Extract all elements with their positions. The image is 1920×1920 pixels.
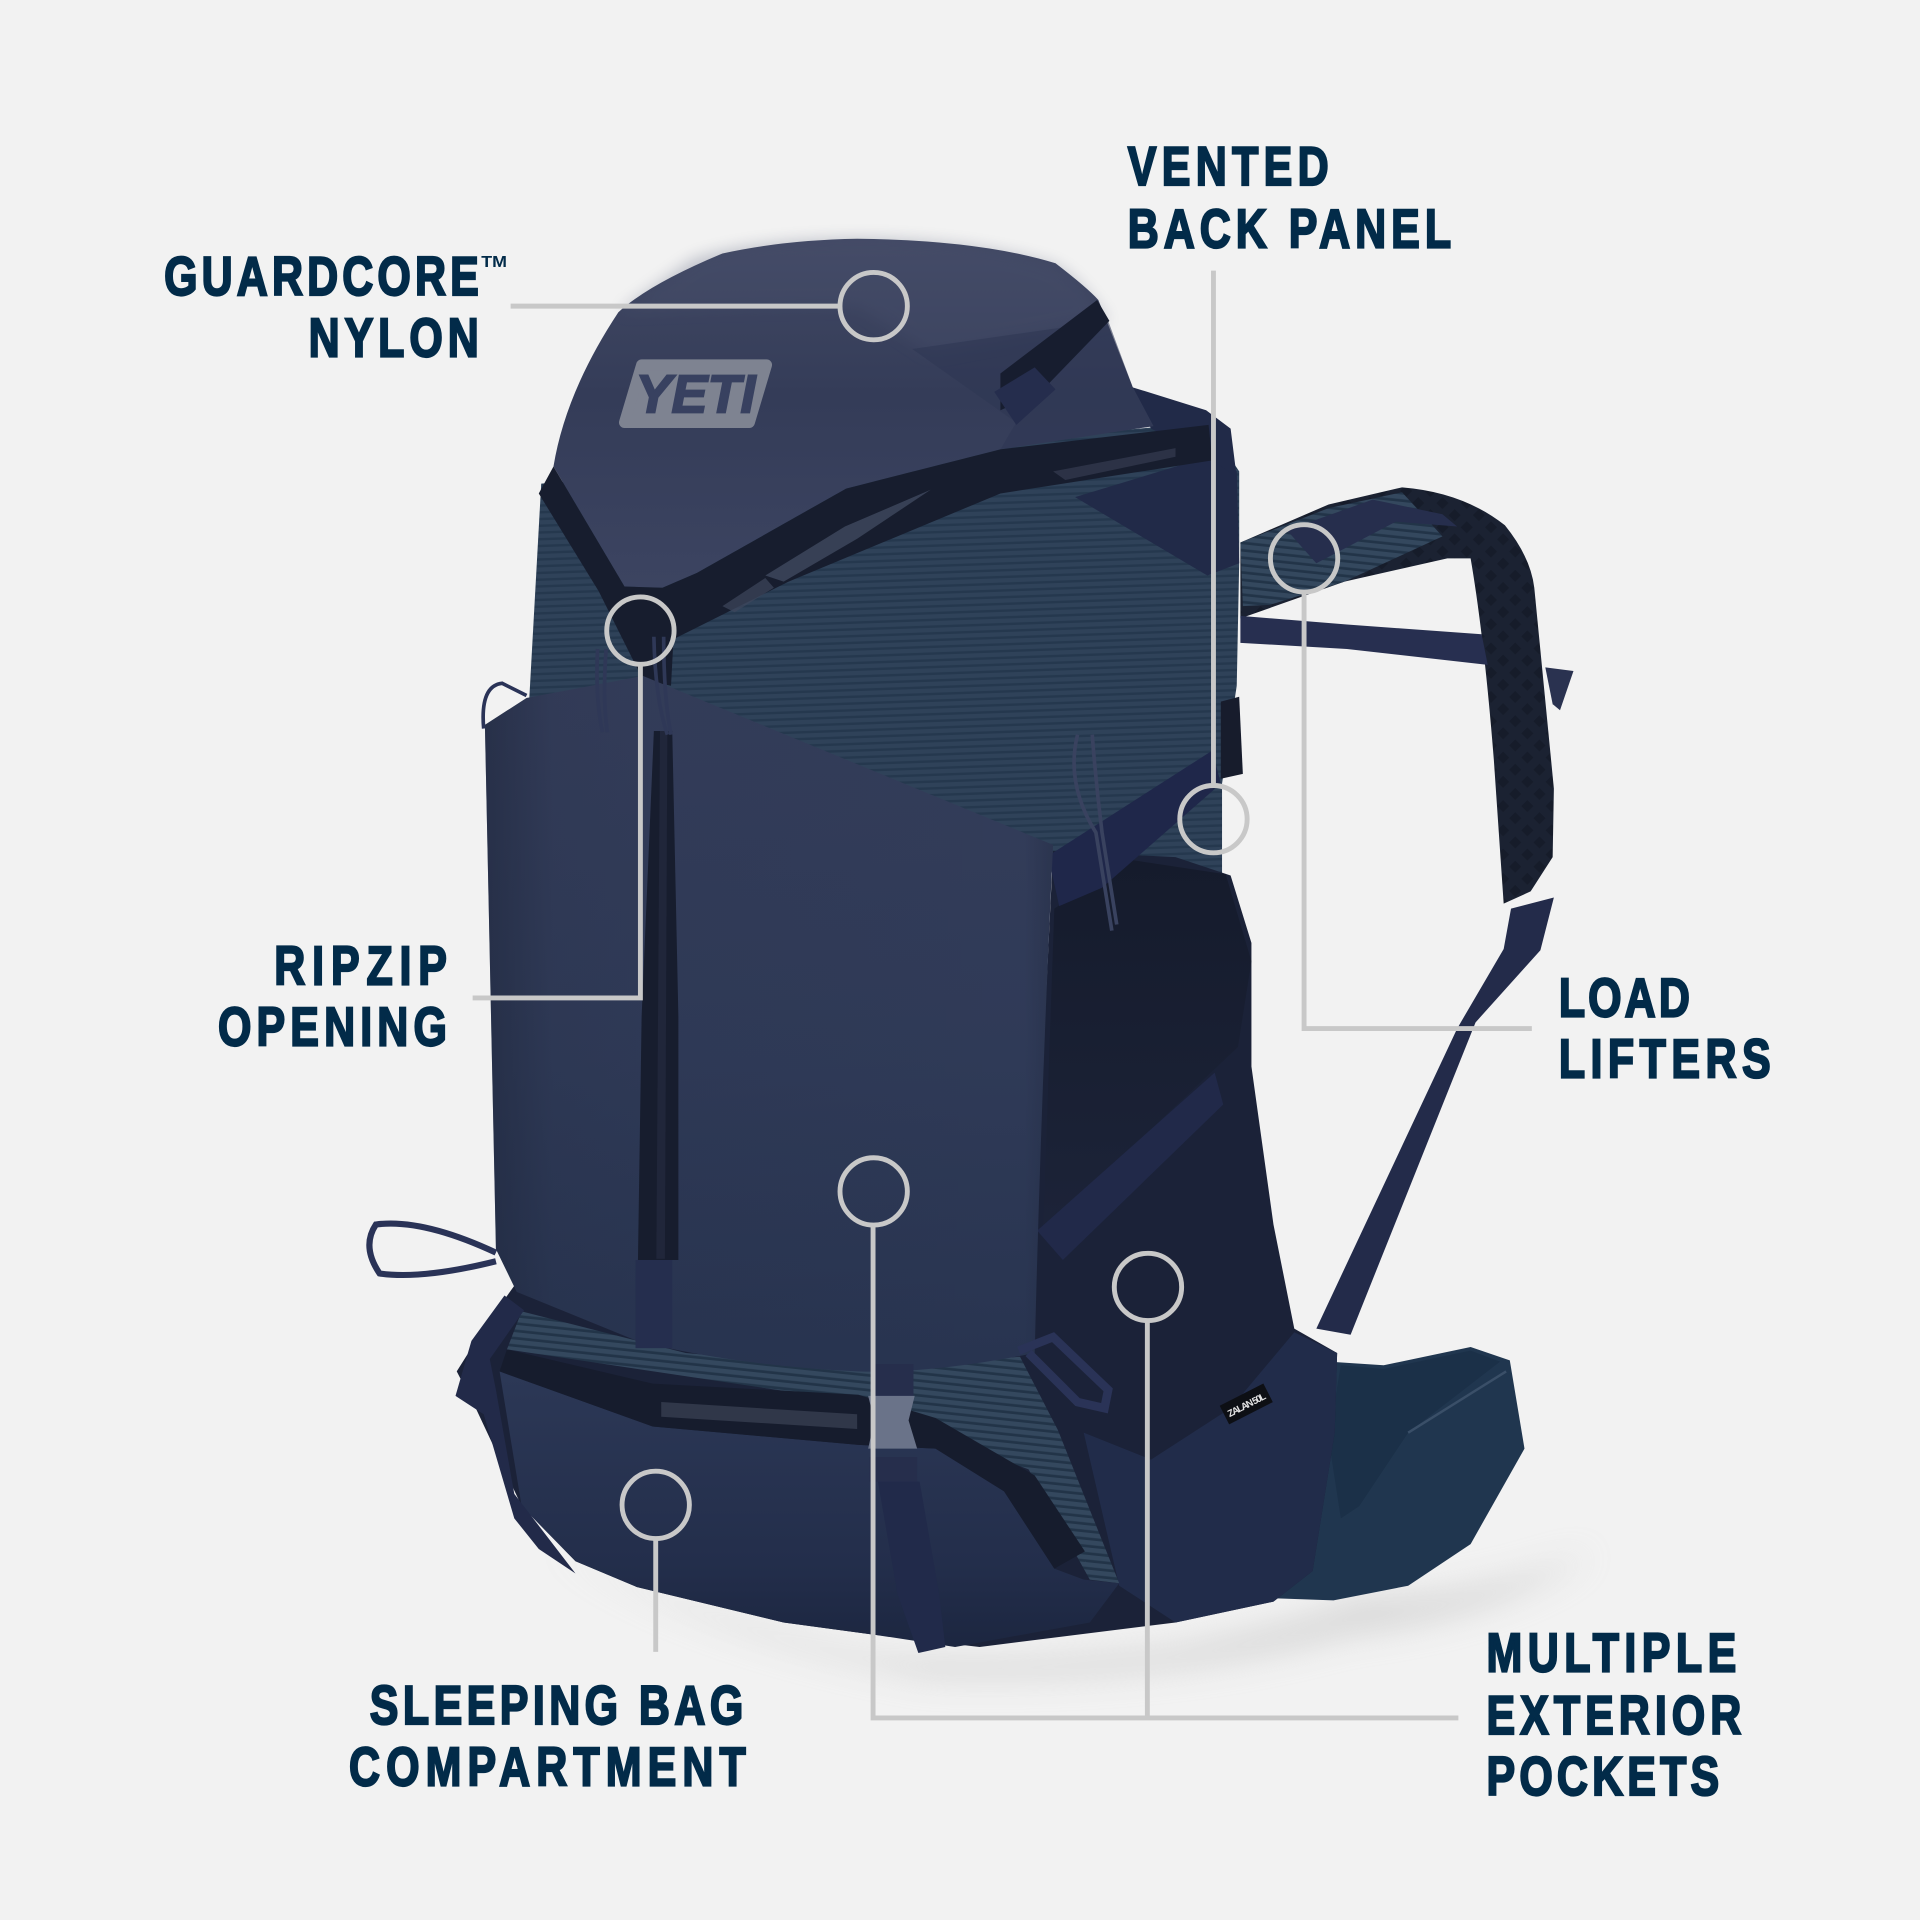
drawcord <box>1074 735 1117 931</box>
label <box>164 246 507 369</box>
front panel <box>485 676 1053 1372</box>
main zipper <box>638 731 678 1260</box>
label <box>218 935 447 1058</box>
leader lines and rings <box>840 1158 1458 1718</box>
label <box>349 1675 746 1798</box>
callout: Load lifters <box>1270 525 1771 1090</box>
side buckle <box>1221 697 1243 779</box>
label: TM <box>481 254 507 271</box>
mid mesh band <box>507 1311 1119 1583</box>
zip cords <box>597 637 671 735</box>
label: RIPZIP <box>274 935 447 997</box>
label: SLEEPING BAG <box>370 1675 743 1736</box>
lid top <box>553 239 1153 588</box>
label: MULTIPLE <box>1487 1622 1736 1684</box>
label: LOAD <box>1559 967 1690 1029</box>
leader line and ring <box>622 1471 689 1652</box>
leader line and ring <box>511 272 907 340</box>
lid strap <box>1000 300 1109 410</box>
grab loop <box>369 1224 496 1275</box>
label: BACK PANEL <box>1128 198 1451 260</box>
main lower body <box>457 851 1337 1647</box>
leader line and ring <box>1270 525 1532 1029</box>
label: LIFTERS <box>1559 1028 1771 1090</box>
label <box>1128 136 1451 260</box>
side stash pocket <box>1043 860 1251 1224</box>
compression strap <box>1048 751 1221 906</box>
backpack illustration <box>369 239 1573 1653</box>
hip zip pouch <box>500 1371 1119 1647</box>
label: POCKETS <box>1487 1746 1719 1807</box>
leader line and ring <box>1180 271 1247 853</box>
label <box>1487 1622 1741 1807</box>
lower zipper <box>500 1349 1085 1569</box>
callout: Multiple exterior pockets <box>840 1158 1741 1807</box>
callout: Guardcore nylon <box>164 246 907 369</box>
hip strap loop <box>1019 1337 1108 1408</box>
zip pull straps <box>636 1260 672 1348</box>
label: NYLON <box>309 307 479 369</box>
callout: RipZip opening <box>218 597 674 1058</box>
brand badge: YETI: YETI <box>636 365 757 425</box>
leader line and ring <box>473 597 674 998</box>
zipper: lid seam <box>539 425 1212 686</box>
label: VENTED <box>1128 136 1329 197</box>
mesh body <box>529 422 1239 877</box>
capacity tag <box>1220 1384 1273 1424</box>
upper back panel <box>1075 456 1239 576</box>
capacity tag: ZALAN 50L <box>1226 1391 1268 1420</box>
callout: Sleeping bag compartment <box>349 1471 746 1798</box>
lower body panel <box>1084 1332 1337 1622</box>
floor shadow <box>551 1545 1592 1678</box>
shoulder strap <box>1240 487 1573 1335</box>
top cord loop <box>483 683 527 729</box>
waist buckle <box>868 1364 945 1653</box>
left side buckle strap <box>456 1296 576 1573</box>
label: EXTERIOR <box>1487 1685 1741 1746</box>
hip pocket <box>1265 1347 1524 1600</box>
label <box>1559 967 1771 1090</box>
label: GUARDCORE <box>164 246 479 307</box>
callout: Vented back panel <box>1128 136 1451 853</box>
label: COMPARTMENT <box>349 1736 746 1798</box>
label: OPENING <box>218 997 447 1058</box>
